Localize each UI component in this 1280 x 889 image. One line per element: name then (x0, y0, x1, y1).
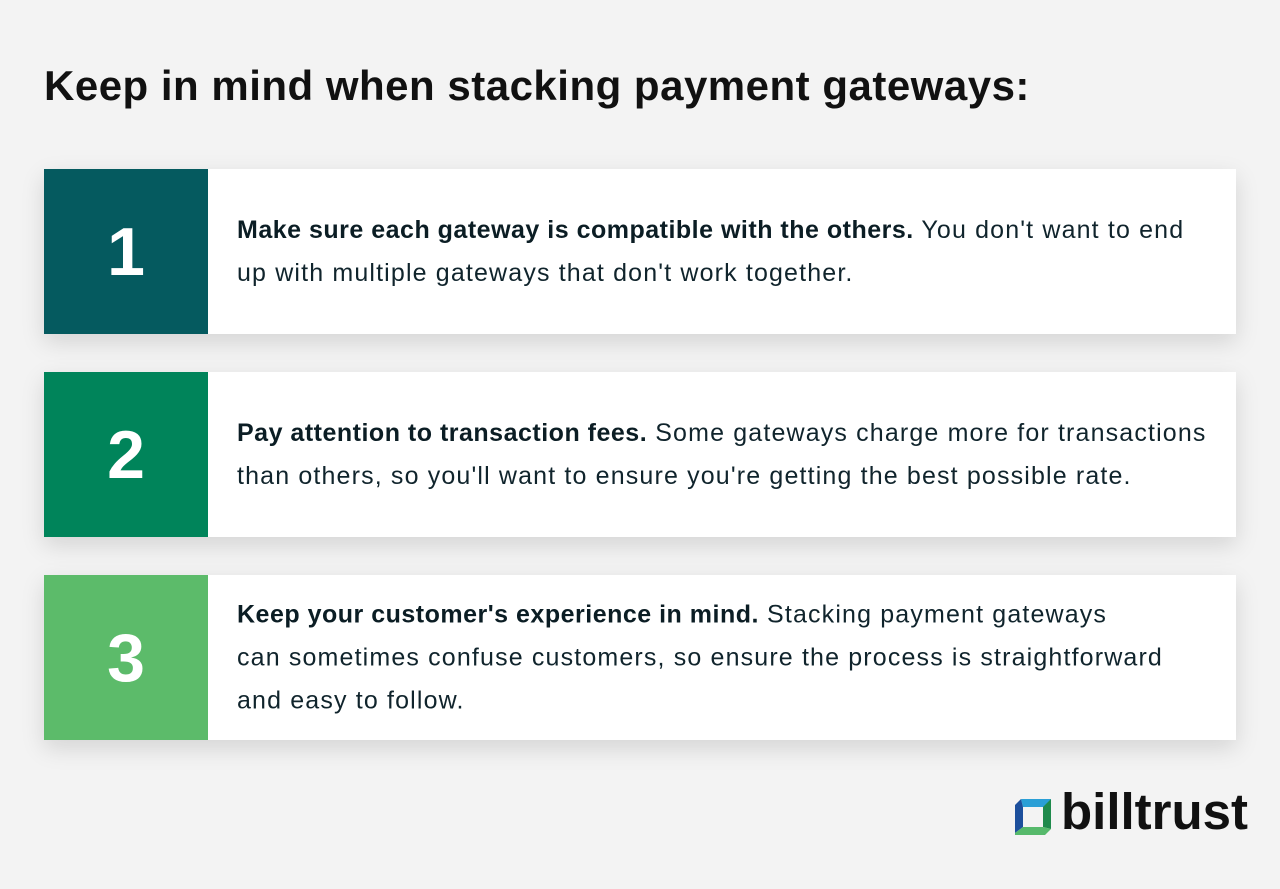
icon: logo mark (1015, 799, 1051, 835)
number 1 (44, 169, 208, 334)
title: Keep in mind when stacking payment gateways: (44, 62, 1030, 109)
logo text: billtrust (1061, 783, 1248, 840)
text 1: Make sure each gateway is compatible with the others. You don't want to end (237, 216, 1184, 244)
logo: billtrust (1015, 783, 1248, 840)
card 1 (44, 169, 1236, 334)
text 2 (237, 418, 1207, 490)
text 1 (237, 216, 1184, 286)
number 2 (44, 372, 208, 537)
number 3: 3 (107, 620, 145, 696)
text 3 (237, 600, 1163, 714)
text 2: than others, so you'll want to ensure you're getting the best possible rate. (237, 462, 1132, 490)
text 1: up with multiple gateways that don't work together. (237, 258, 854, 286)
number 3 (44, 575, 208, 740)
card 3 (44, 575, 1236, 740)
text 3: can sometimes confuse customers, so ensure the process is straightforward (237, 643, 1163, 671)
card 2 (44, 372, 1236, 537)
text 3: Keep your customer's experience in mind. Stacking payment gateways (237, 600, 1107, 628)
number 1: 1 (107, 214, 145, 290)
text 3: and easy to follow. (237, 686, 465, 714)
text 2: Pay attention to transaction fees. Some gateways charge more for transactions (237, 418, 1207, 446)
number 2: 2 (107, 416, 145, 492)
